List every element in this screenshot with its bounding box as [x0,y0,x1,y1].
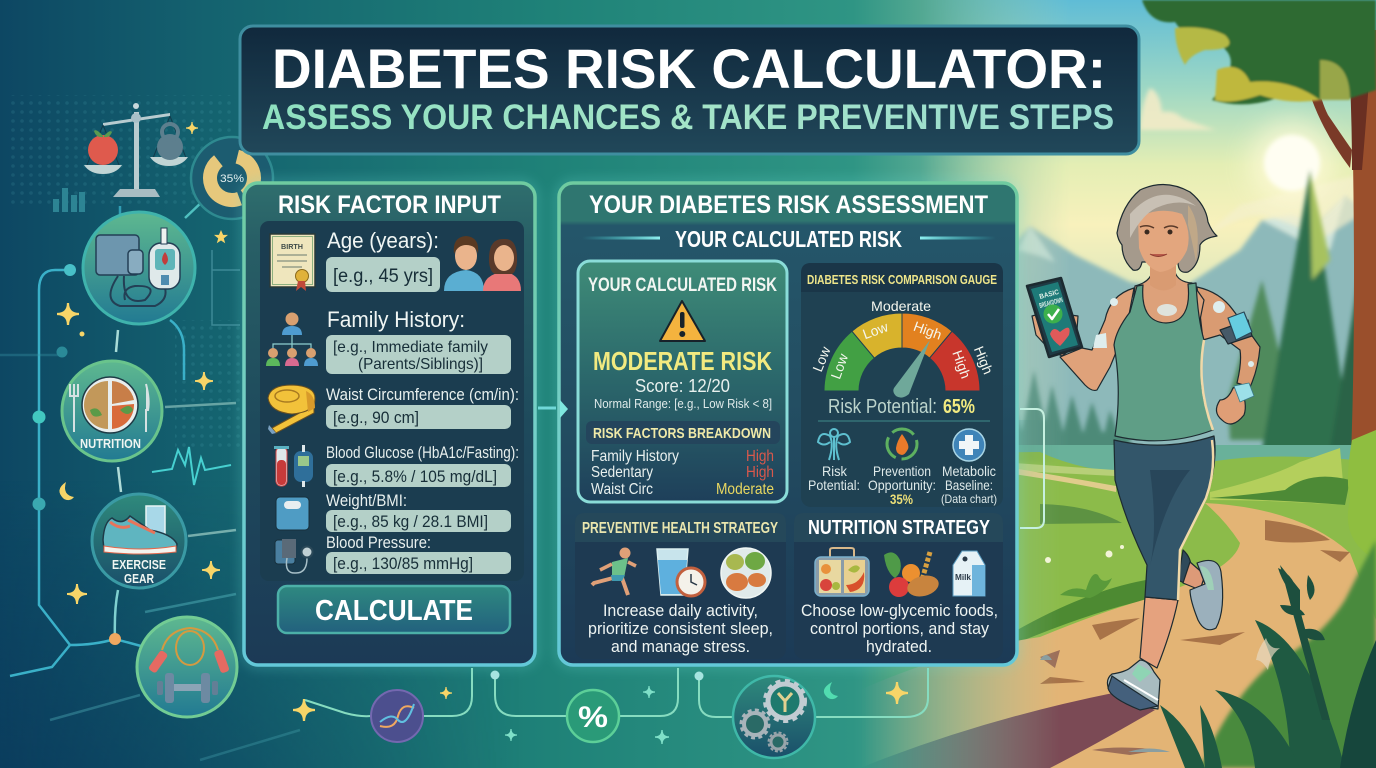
gauge [809,298,996,398]
foreground bushes right [1160,430,1376,768]
right arm [1197,287,1260,387]
icon: healthy plate [721,548,771,598]
gauge segment labels: High [911,318,944,343]
stat labels: Prevention [873,463,931,479]
icon: tape measure [268,385,315,434]
icon: exercise gear [92,494,186,588]
card: preventive health strategy: prioritize consistent sleep, [588,619,773,638]
kettlebell [157,134,183,160]
card: nutrition strategy: control portions, and stay [810,619,989,638]
torso skin [1130,272,1204,330]
row: waist circumference [268,385,519,434]
row: waist circumference: Waist Circumference (cm/in): [326,385,519,404]
icon: two people [444,236,521,291]
row: age: Age (years): [327,228,439,253]
back leg and shoe [1178,550,1223,630]
breakdown rows [591,448,774,498]
card: risk comparison gauge [801,263,1003,507]
connector nodes [32,264,121,645]
apple [88,135,118,165]
heading: YOUR DIABETES RISK ASSESSMENT [589,191,988,219]
outdoor scene [860,0,1376,768]
icon: test tube and glucose meter [274,445,313,487]
stat labels: Opportunity: [868,477,936,493]
subtitle: ASSESS YOUR CHANCES & TAKE PREVENTIVE STEPS [262,98,1114,137]
row: family history: Family History: [327,307,465,332]
stat labels: 35% [890,491,913,507]
risk potential: Risk Potential: [828,396,937,418]
card: risk comparison gauge: DIABETES RISK COMPARISON GAUGE [807,272,997,287]
hand and phone: BREAKDOWN [1039,297,1064,310]
left dark floor shade [0,596,432,768]
icon: birth certificate [270,234,315,291]
panel: risk factor input [244,183,535,665]
tree foliage [1142,0,1376,104]
grass tufts and flowers [1045,545,1124,598]
gauge segment labels: Low [827,351,852,381]
icon: jump rope and dumbbell [137,617,237,717]
gauge segment labels: High [971,344,996,376]
row: waist circumference: [e.g., 90 cm] [333,408,419,427]
icon: lunch box [815,548,869,596]
arrow between panels [560,400,568,418]
card: nutrition strategy: Choose low-glycemic foods, [801,601,998,620]
icon: water glass and clock [657,549,705,596]
grass [860,445,1376,768]
front shoe [1107,660,1160,710]
row: weight and BMI: Weight/BMI: [326,491,407,510]
stat labels: Metabolic [942,463,996,479]
icon: fresh food group [884,552,941,600]
mountains [1018,176,1354,445]
icon: exercise gear: EXERCISE [112,558,166,572]
calculate button: CALCULATE [315,595,473,627]
icon: gears circle [733,676,815,758]
breakdown rows: Family History [591,448,679,465]
stat labels: Baseline: [945,477,993,493]
row: family history [266,307,511,374]
title: DIABETES RISK CALCULATOR: [272,37,1106,100]
card: nutrition strategy: NUTRITION STRATEGY [808,517,991,539]
row: blood glucose: Blood Glucose (HbA1c/Fasting): [326,443,519,462]
gauge segment labels: Low [860,318,891,342]
stat labels [808,463,997,507]
subheading: YOUR CALCULATED RISK [675,226,902,252]
card: nutrition strategy: hydrated. [866,637,932,656]
hand and phone: BASIC [1039,289,1060,301]
row: weight and BMI: [e.g., 85 kg / 28.1 BMI] [333,512,488,531]
icon: family tree [266,312,318,366]
icon: warning triangle [660,301,705,341]
panel: risk assessment [559,183,1017,665]
runner shadow [860,693,1155,768]
runner woman [1027,184,1260,710]
hand and phone [1027,278,1082,357]
title panel [240,26,1139,154]
icon: blood pressure monitor [275,539,312,573]
row: blood pressure: [e.g., 130/85 mmHg] [333,554,473,573]
stat labels: (Data chart) [941,492,997,506]
icon: balance scale with apple and kettlebell [84,103,188,197]
decorative stars [57,122,908,744]
icon: milk carton: Milk [955,573,972,582]
cloud [1140,88,1216,130]
wristband and fist [1216,386,1245,424]
donut chart 35% [191,137,273,219]
donut chart 35%: 35% [220,173,244,185]
icon: risk potential pancreas [818,429,850,460]
row: blood pressure: Blood Pressure: [326,533,431,552]
row: blood glucose [274,443,519,487]
neck and head [1117,184,1217,290]
leggings [1114,436,1215,600]
row: blood pressure [275,533,511,574]
icon: exercise gear: GEAR [124,572,154,586]
row: age: [e.g., 45 yrs] [333,266,433,287]
pine trees right [1228,170,1376,450]
icon: nutrition plate: NUTRITION [80,437,141,451]
left arm [1060,288,1134,390]
form list background [260,221,524,581]
breakdown rows: Sedentary [591,464,653,481]
panel glow [244,183,1017,665]
connector dots [490,670,704,680]
far meadow band [1018,463,1114,476]
icon: DNA circle [371,690,423,742]
card: preventive health strategy: Increase daily activity, [603,601,758,620]
breakdown header [586,421,780,444]
icon: percent circle [567,690,619,742]
icon: runner [592,548,636,595]
gauge segment labels: High [949,348,974,381]
icon: blood pressure cuff and glucose meter [83,212,195,324]
icon: prevention opportunity [887,429,917,459]
tank top [1114,283,1213,441]
row: blood glucose: [e.g., 5.8% / 105 mg/dL] [333,467,497,486]
heading: RISK FACTOR INPUT [278,191,501,219]
gauge needle [893,340,930,398]
dirt path [860,503,1376,768]
stat labels: Risk [822,463,848,479]
card: nutrition strategy [794,513,1003,659]
sun [1250,121,1334,205]
mini bar chart decoration [53,188,85,212]
sky [880,0,1376,420]
card: calculated risk: MODERATE RISK [593,346,772,376]
dotted background texture [10,95,240,450]
calculate button [278,586,510,633]
stat labels: Potential: [808,477,860,493]
tree trunk and branches [1250,15,1376,480]
breakdown rows: Waist Circ [591,481,653,498]
card: preventive health strategy: PREVENTIVE HEALTH STRATEGY [582,520,778,537]
risk potential: 65% [943,396,975,418]
card: preventive health strategy: and manage stress. [611,637,750,656]
icon: birth certificate: BIRTH [281,244,303,251]
icon: metabolic baseline plus [953,429,985,461]
gauge segment labels: Low [809,343,834,374]
distant pines left [1018,372,1132,445]
arm band device [1220,312,1252,344]
row: family history: (Parents/Siblings)] [358,356,483,373]
card: calculated risk: Normal Range: [e.g., Low Risk < 8] [594,397,772,411]
card: calculated risk: YOUR CALCULATED RISK [588,275,777,296]
row: family history: [e.g., Immediate family [333,339,488,356]
heartbeat line [152,447,231,485]
card: preventive health strategy [575,513,786,659]
card: calculated risk: Score: 12/20 [635,376,730,396]
front calf [1140,597,1178,668]
rocks [1040,655,1170,752]
icon: milk carton [953,551,985,596]
row: weight and BMI [276,491,511,532]
card: calculated risk [578,261,787,502]
breakdown rows: High [746,464,774,481]
gauge segment labels: Moderate [871,298,931,314]
bottom connector lines [305,408,1044,717]
icon: percent circle: % [578,701,608,734]
card: calculated risk: RISK FACTORS BREAKDOWN [593,425,771,442]
breakdown rows: Moderate [716,481,774,498]
breakdown rows: High [746,448,774,465]
gauge segment labels [809,298,996,381]
icon: nutrition plate [62,361,162,461]
icon: bathroom scale [276,497,309,530]
left background connector lines [0,200,300,760]
row: age [270,228,521,292]
sensor patches [1093,298,1254,367]
grass shadow [1040,504,1122,524]
